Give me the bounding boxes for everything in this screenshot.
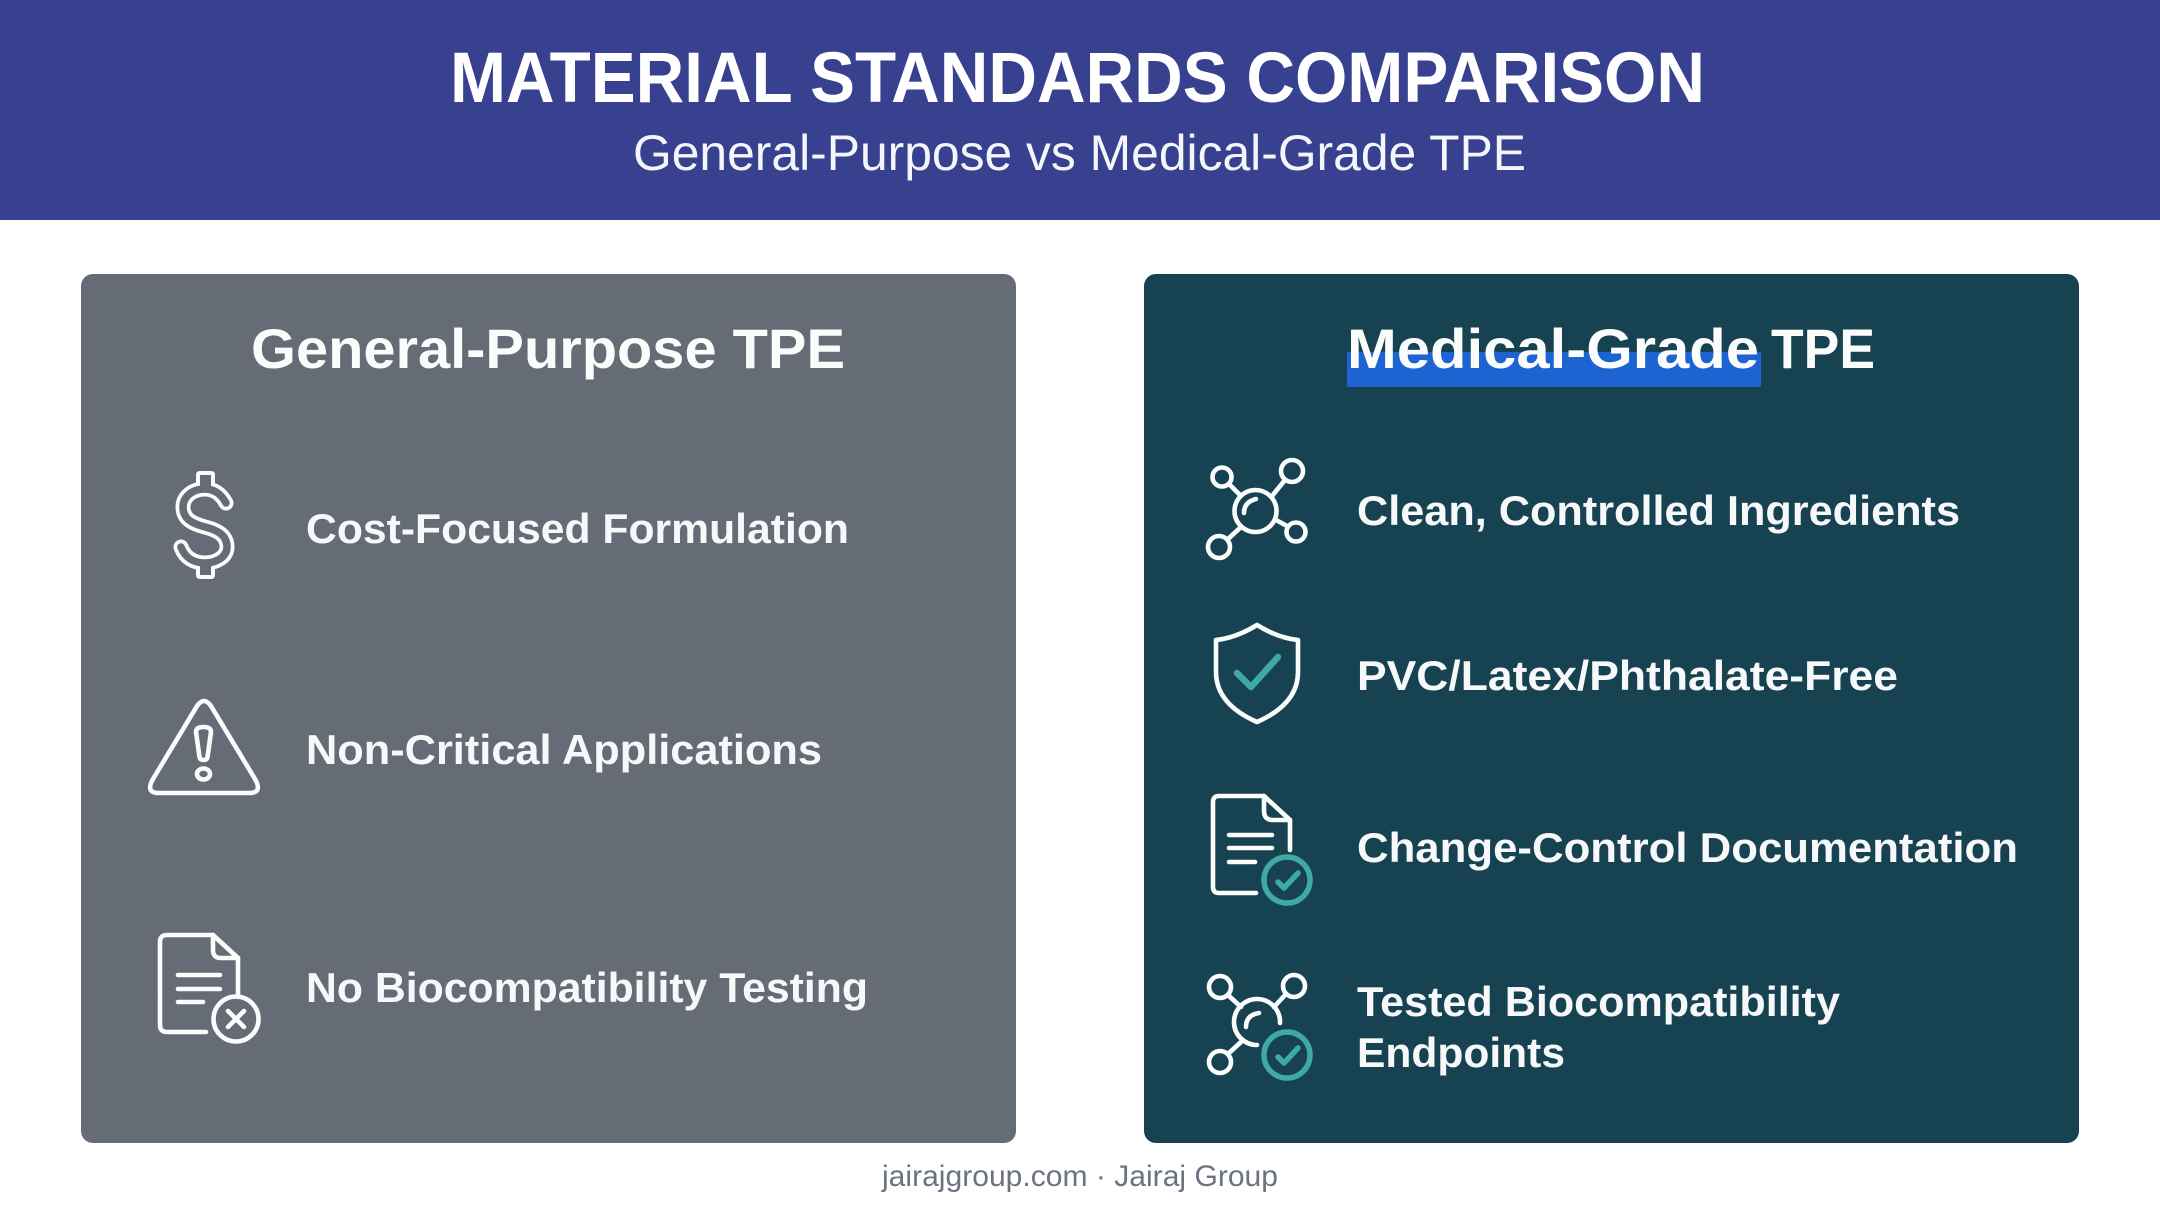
footer credit: jairajgroup.com · Jairaj Group	[881, 1160, 1278, 1193]
item text: endpoints: Endpoints	[1357, 1029, 1565, 1076]
item text: no biocompatibility: No Biocompatibility Testing	[306, 964, 868, 1011]
panel: medical-grade TPE	[1144, 274, 2079, 1143]
heading: medical-grade: Medical-Grade	[1347, 317, 1759, 380]
subtitle: General-Purpose vs Medical-Grade TPE	[633, 125, 1526, 181]
item text: cost: Cost-Focused Formulation	[306, 505, 849, 552]
icon: dollar	[181, 473, 227, 577]
title: MATERIAL STANDARDS COMPARISON	[450, 39, 1705, 118]
heading: general-purpose: General-Purpose TPE	[251, 317, 845, 380]
header banner	[0, 0, 2160, 220]
icon: molecule	[1208, 460, 1306, 558]
icon: document with x	[160, 935, 258, 1042]
item text: change-control: Change-Control Documentation	[1357, 824, 2018, 871]
panel: general-purpose TPE	[81, 274, 1016, 1143]
heading: medical-grade: TPE	[1771, 317, 1875, 380]
icon: shield check	[1216, 625, 1298, 722]
icon: warning triangle	[150, 701, 258, 793]
icon: molecule with check	[1209, 975, 1310, 1078]
heading highlight	[1347, 352, 1761, 387]
item text: tested biocompatibility: Tested Biocompatibility	[1357, 978, 1841, 1025]
item text: non-critical: Non-Critical Applications	[306, 726, 822, 773]
icon: document with check	[1213, 796, 1310, 903]
item text: clean: Clean, Controlled Ingredients	[1357, 487, 1960, 534]
item text: pvc: PVC/Latex/Phthalate-Free	[1357, 652, 1898, 699]
